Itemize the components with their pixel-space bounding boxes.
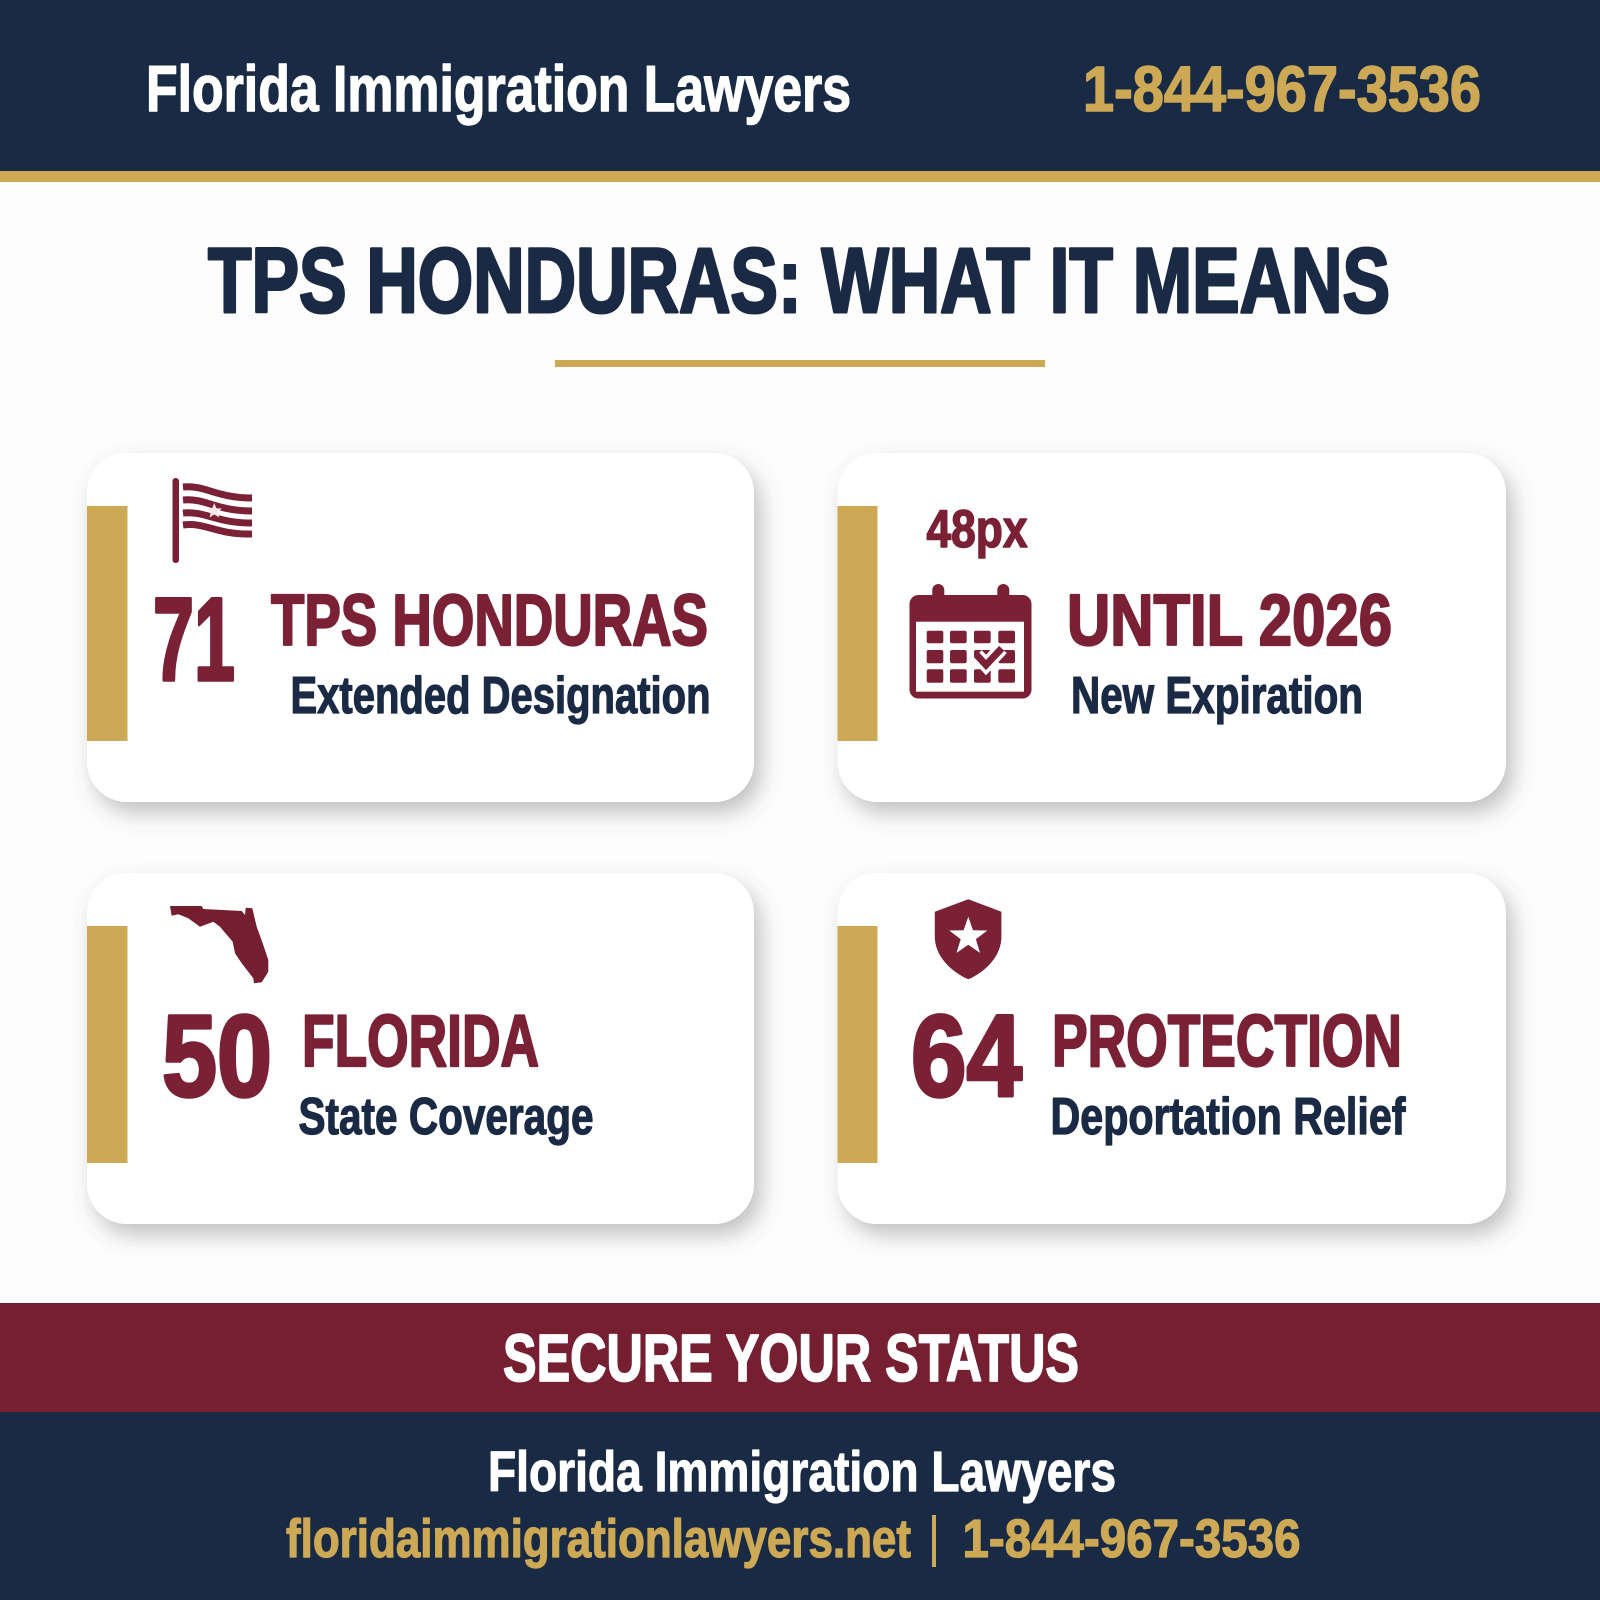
panel: Until 2026 bbox=[838, 453, 1506, 802]
stray size label 48px: 48px bbox=[926, 500, 1028, 559]
icon: calendar bbox=[910, 584, 1032, 698]
card heading: TPS HONDURAS bbox=[271, 581, 708, 661]
panel: TPS Honduras bbox=[87, 453, 754, 802]
card heading: UNTIL 2026 bbox=[1067, 581, 1392, 661]
header firm name: Florida Immigration Lawyers bbox=[146, 52, 851, 125]
card subheading: Extended Designation bbox=[290, 667, 710, 725]
stat number 64: 64 bbox=[911, 991, 1022, 1121]
panel: Protection bbox=[838, 873, 1506, 1224]
card subheading: State Coverage bbox=[298, 1088, 594, 1146]
stat number 71: 71 bbox=[153, 574, 235, 706]
call to action banner bbox=[0, 1303, 1600, 1412]
header band bbox=[0, 0, 1600, 182]
title underline bbox=[555, 360, 1045, 367]
footer band bbox=[0, 1412, 1600, 1600]
footer phone number: 1-844-967-3536 bbox=[962, 1509, 1300, 1569]
stat number 50: 50 bbox=[162, 991, 272, 1121]
icon: Florida state outline bbox=[170, 906, 268, 983]
banner text: SECURE YOUR STATUS bbox=[503, 1321, 1079, 1396]
icon: flag bbox=[172, 478, 252, 563]
card heading: FLORIDA bbox=[302, 1001, 539, 1082]
panel: Florida bbox=[87, 873, 754, 1224]
footer website: floridaimmigrationlawyers.net bbox=[286, 1509, 911, 1569]
card subheading: Deportation Relief bbox=[1050, 1088, 1406, 1146]
header phone number: 1-844-967-3536 bbox=[1083, 53, 1481, 125]
footer firm name: Florida Immigration Lawyers bbox=[488, 1440, 1116, 1504]
card subheading: New Expiration bbox=[1071, 667, 1363, 725]
card heading: PROTECTION bbox=[1052, 1001, 1402, 1082]
footer separator bbox=[932, 1515, 936, 1567]
icon: shield with star bbox=[935, 899, 1001, 979]
